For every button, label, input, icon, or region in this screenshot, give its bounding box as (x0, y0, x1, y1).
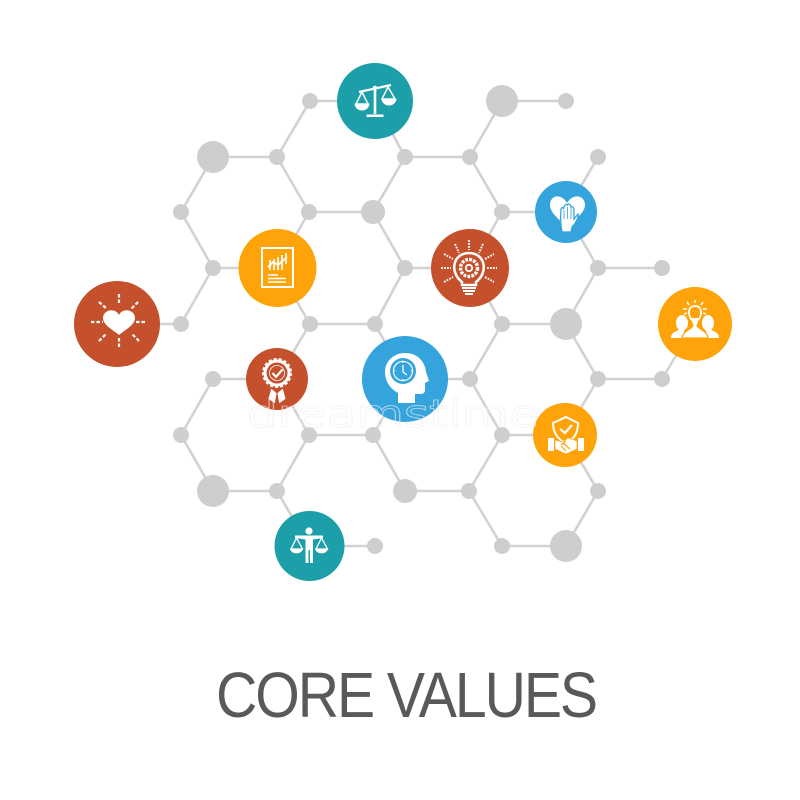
badge: award rosette (246, 348, 308, 410)
network: grey nodes (173, 85, 670, 562)
title: CORE VALUES (216, 659, 596, 731)
badge: raised hand on heart (535, 181, 597, 243)
badge: lightbulb with gear (431, 229, 509, 307)
badge: report with chart (238, 229, 316, 307)
badge: head with clock (362, 336, 448, 422)
network: hexagon connector lines (117, 101, 695, 546)
badge: person balancing scales (274, 511, 344, 581)
badge: balance scales (337, 63, 413, 139)
watermark: dreamstime (247, 392, 539, 436)
badge: people with idea (658, 287, 732, 361)
badge: heart with rays (74, 281, 160, 367)
badge: shield and handshake (533, 403, 597, 467)
